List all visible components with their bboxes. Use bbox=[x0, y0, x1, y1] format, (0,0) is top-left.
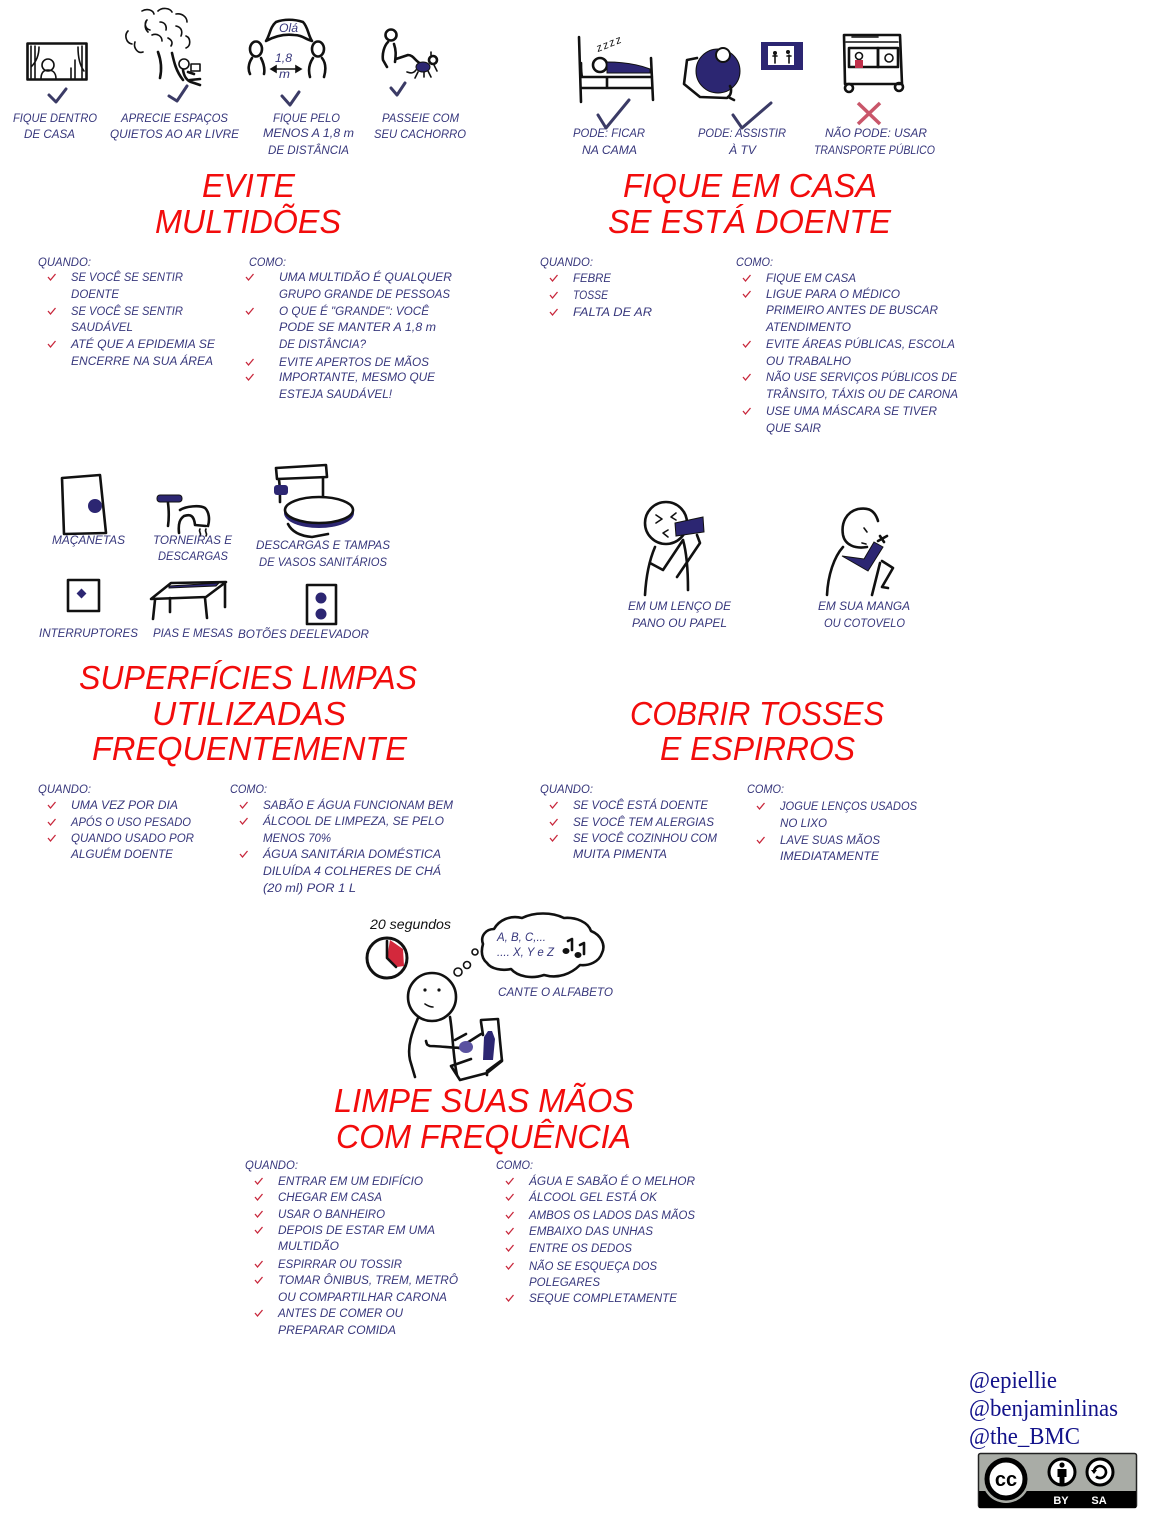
list: como cobrir bbox=[747, 784, 917, 863]
list: quando limpar mãos: TOMAR ÔNIBUS, TREM, METRÔ bbox=[278, 1274, 458, 1287]
list: como limpar mãos: ÁGUA E SABÃO É O MELHOR bbox=[528, 1175, 695, 1188]
icon: check tv bbox=[733, 103, 771, 128]
list: como cobrir: JOGUE LENÇOS USADOS bbox=[779, 801, 917, 813]
icon: person washing hands bbox=[408, 973, 502, 1080]
list: como limpar mãos: COMO: bbox=[496, 1160, 533, 1172]
list: como ficar em casa: USE UMA MÁSCARA SE TIVER bbox=[766, 405, 937, 418]
panel: limpe suas mãos bbox=[245, 914, 695, 1337]
icon: door bbox=[62, 475, 106, 534]
list: como evitar: PODE SE MANTER A 1,8 m bbox=[279, 322, 436, 334]
list: quando limpar mãos: CHEGAR EM CASA bbox=[278, 1192, 382, 1204]
list: quando ficar em casa: FEBRE bbox=[573, 273, 611, 285]
icon: television bbox=[761, 42, 803, 70]
list: como limpar mãos: ENTRE OS DEDOS bbox=[529, 1243, 632, 1255]
icon: check window bbox=[49, 89, 66, 102]
icon: person sneezing into elbow bbox=[827, 508, 893, 595]
credits: twitter handles bbox=[969, 1368, 1118, 1450]
list: como limpar: MENOS 70% bbox=[263, 833, 331, 845]
list: como ficar em casa: COMO: bbox=[736, 257, 773, 269]
icon: faucet bbox=[157, 495, 209, 536]
list: quando limpar mãos: QUANDO: bbox=[245, 1160, 298, 1172]
list: como evitar: IMPORTANTE, MESMO QUE bbox=[279, 372, 435, 384]
list: quando limpar mãos: ESPIRRAR OU TOSSIR bbox=[278, 1259, 402, 1271]
list: como limpar mãos: ÁLCOOL GEL ESTÁ OK bbox=[528, 1191, 658, 1204]
label: em um lenço bbox=[628, 601, 731, 630]
icon: check distance bbox=[282, 92, 299, 105]
icon: check bed bbox=[598, 100, 629, 128]
label: pode ficar na cama: PODE: FICAR bbox=[573, 128, 645, 140]
label: pode assistir tv: PODE: ASSISTIR bbox=[698, 128, 786, 140]
icon: person inside house window bbox=[28, 44, 86, 80]
icon: person in bed bbox=[579, 34, 653, 102]
icon: elevator buttons bbox=[307, 585, 336, 624]
label: fique dentro de casa: FIQUE DENTRO bbox=[13, 113, 97, 125]
label: fique dentro de casa: DE CASA bbox=[24, 129, 75, 141]
credits: twitter handles: @the_BMC bbox=[969, 1424, 1080, 1450]
list: quando evitar: ATÉ QUE A EPIDEMIA SE bbox=[70, 338, 215, 351]
list: quando ficar em casa: TOSSE bbox=[573, 290, 608, 302]
list: como evitar: ESTEJA SAUDÁVEL! bbox=[279, 388, 393, 401]
list: como evitar: COMO: bbox=[249, 257, 286, 269]
label: em sua manga: OU COTOVELO bbox=[824, 618, 905, 630]
heading: fique em casa: SE ESTÁ DOENTE bbox=[608, 203, 892, 240]
list: quando limpar mãos: PREPARAR COMIDA bbox=[278, 1325, 396, 1337]
label: fique dentro de casa bbox=[13, 113, 97, 141]
icon: check dog bbox=[391, 83, 405, 95]
heading: limpe suas mãos bbox=[334, 1082, 634, 1155]
icon: tree with reading person bbox=[126, 8, 200, 85]
list: como cobrir: NO LIXO bbox=[780, 818, 827, 830]
text: Olá: Olá bbox=[279, 23, 299, 35]
list: como limpar: (20 ml) POR 1 L bbox=[263, 883, 356, 895]
list: como limpar mãos: POLEGARES bbox=[529, 1277, 600, 1289]
panel: cobrir tosses e espirros bbox=[540, 502, 917, 863]
list: quando evitar: QUANDO: bbox=[38, 257, 91, 269]
label: fique pelo menos: FIQUE PELO bbox=[273, 113, 340, 125]
label: botões de elevador: BOTÕES DEELEVADOR bbox=[238, 628, 369, 641]
list: como limpar mãos: NÃO SE ESQUEÇA DOS bbox=[529, 1260, 657, 1273]
list: como ficar em casa: OU TRABALHO bbox=[766, 356, 851, 368]
list: como evitar: O QUE É "GRANDE": VOCÊ bbox=[279, 305, 429, 318]
heading: superfícies limpas: FREQUENTEMENTE bbox=[92, 730, 408, 767]
label: não pode transporte: NÃO PODE: USAR bbox=[825, 127, 927, 140]
text: distance m: m bbox=[279, 69, 290, 81]
list: como limpar: ÁGUA SANITÁRIA DOMÉSTICA bbox=[262, 848, 441, 861]
list: como limpar bbox=[230, 784, 453, 895]
label: em um lenço: EM UM LENÇO DE bbox=[628, 601, 731, 613]
list: quando evitar bbox=[38, 257, 215, 368]
list: quando cobrir: QUANDO: bbox=[540, 784, 593, 796]
label: maçanetas: MAÇANETAS bbox=[52, 535, 125, 547]
list: quando ficar em casa bbox=[540, 257, 652, 319]
label: não pode transporte: TRANSPORTE PÚBLICO bbox=[814, 144, 935, 157]
list: como evitar: GRUPO GRANDE DE PESSOAS bbox=[279, 289, 450, 301]
list: quando evitar: DOENTE bbox=[71, 289, 119, 301]
label: passeie com cachorro: PASSEIE COM bbox=[382, 113, 459, 125]
list: como ficar em casa: QUE SAIR bbox=[766, 423, 821, 435]
heading: fique em casa: FIQUE EM CASA bbox=[623, 167, 877, 204]
label: interruptores: INTERRUPTORES bbox=[39, 628, 138, 640]
heading: evite multidões: MULTIDÕES bbox=[155, 203, 341, 240]
list: como ficar em casa: FIQUE EM CASA bbox=[766, 273, 856, 285]
heading: fique em casa bbox=[608, 167, 892, 240]
label: torneiras e descargas: TORNEIRAS E bbox=[153, 535, 232, 547]
list: quando limpar: QUANDO USADO POR bbox=[71, 833, 194, 845]
list: como limpar mãos: EMBAIXO DAS UNHAS bbox=[529, 1226, 653, 1238]
credits: twitter handles: @benjaminlinas bbox=[969, 1396, 1118, 1422]
icon: person in bed: zzzz bbox=[594, 34, 624, 55]
list: quando limpar bbox=[38, 784, 194, 861]
label: descargas e tampas: DE VASOS SANITÁRIOS bbox=[259, 556, 387, 569]
list: quando limpar: ALGUÉM DOENTE bbox=[70, 848, 173, 861]
icon: toilet bbox=[274, 465, 354, 537]
icon: creative commons by-sa badge: BY bbox=[1053, 1495, 1069, 1507]
label: aprecie espaços: QUIETOS AO AR LIVRE bbox=[110, 129, 239, 141]
list: quando limpar mãos: OU COMPARTILHAR CARONA bbox=[278, 1292, 447, 1304]
icon: bus bbox=[844, 35, 903, 92]
label: cante o alfabeto: CANTE O ALFABETO bbox=[498, 987, 613, 999]
list: quando cobrir: SE VOCÊ TEM ALERGIAS bbox=[573, 816, 714, 829]
heading: cobrir tosses: COBRIR TOSSES bbox=[630, 695, 884, 732]
list: quando evitar: SAUDÁVEL bbox=[71, 321, 133, 334]
list: quando limpar: UMA VEZ POR DIA bbox=[71, 800, 178, 812]
icon: clock bbox=[367, 938, 407, 978]
label: pias e mesas: PIAS E MESAS bbox=[153, 628, 233, 640]
icon: thought cloud bbox=[454, 914, 603, 977]
text: 20 segundos: 20 segundos bbox=[369, 916, 451, 932]
list: quando limpar mãos: ENTRAR EM UM EDIFÍCIO bbox=[278, 1175, 423, 1188]
list: quando ficar em casa: FALTA DE AR bbox=[573, 307, 652, 319]
heading: limpe suas mãos: COM FREQUÊNCIA bbox=[336, 1118, 631, 1155]
icon: check tree bbox=[169, 86, 187, 101]
label: passeie com cachorro bbox=[374, 113, 466, 141]
heading: superfícies limpas: UTILIZADAS bbox=[152, 695, 346, 732]
label: em sua manga bbox=[818, 601, 910, 630]
heading: cobrir tosses bbox=[630, 695, 884, 767]
heading: superfícies limpas: SUPERFÍCIES LIMPAS bbox=[79, 659, 417, 696]
list: quando evitar: SE VOCÊ SE SENTIR bbox=[71, 305, 183, 318]
label: torneiras e descargas: DESCARGAS bbox=[158, 551, 228, 563]
list: como ficar em casa: LIGUE PARA O MÉDICO bbox=[766, 288, 900, 301]
icon: cross bbox=[858, 103, 880, 124]
label: em um lenço: PANO OU PAPEL bbox=[632, 618, 727, 630]
text: alfabeto início: A, B, C,... bbox=[496, 932, 546, 944]
label: fique pelo menos bbox=[263, 113, 354, 157]
label: fique pelo menos: MENOS A 1,8 m bbox=[263, 128, 354, 140]
label: em sua manga: EM SUA MANGA bbox=[818, 601, 910, 613]
icon: creative commons by-sa badge: SA bbox=[1091, 1495, 1107, 1507]
label: aprecie espaços: APRECIE ESPAÇOS bbox=[120, 113, 228, 125]
text: distance 1,8: 1,8 bbox=[275, 53, 293, 65]
icon: person walking dog bbox=[383, 30, 437, 78]
list: quando limpar: QUANDO: bbox=[38, 784, 91, 796]
list: como evitar: EVITE APERTOS DE MÃOS bbox=[279, 356, 429, 369]
icon: table bbox=[151, 582, 226, 619]
heading: evite multidões bbox=[155, 167, 341, 240]
list: como evitar: UMA MULTIDÃO É QUALQUER bbox=[279, 271, 452, 284]
list: como ficar em casa: NÃO USE SERVIÇOS PÚBLICOS DE bbox=[766, 371, 957, 384]
icon: two people keeping distance bbox=[249, 20, 325, 77]
list: como evitar bbox=[246, 257, 452, 401]
label: pode ficar na cama: NA CAMA bbox=[582, 145, 637, 157]
list: como ficar em casa: ATENDIMENTO bbox=[765, 322, 851, 334]
credits: twitter handles: @epiellie bbox=[969, 1368, 1057, 1394]
label: descargas e tampas: DESCARGAS E TAMPAS bbox=[256, 540, 390, 552]
list: como cobrir: COMO: bbox=[747, 784, 784, 796]
list: como limpar: DILUÍDA 4 COLHERES DE CHÁ bbox=[263, 865, 441, 878]
icon: light switch bbox=[68, 580, 99, 611]
panel: superfícies limpas bbox=[38, 465, 453, 895]
list: como evitar: DE DISTÂNCIA? bbox=[279, 338, 367, 351]
label: não pode transporte bbox=[814, 127, 935, 157]
list: quando limpar mãos bbox=[245, 1160, 458, 1337]
heading: cobrir tosses: E ESPIRROS bbox=[660, 730, 855, 767]
icon: creative commons by-sa badge: cc bbox=[995, 1469, 1017, 1491]
list: quando limpar mãos: DEPOIS DE ESTAR EM UMA bbox=[278, 1225, 435, 1237]
icon: creative commons by-sa badge bbox=[978, 1454, 1136, 1508]
list: quando limpar: APÓS O USO PESADO bbox=[70, 816, 191, 829]
list: quando limpar mãos: USAR O BANHEIRO bbox=[278, 1209, 385, 1221]
label: pode assistir tv bbox=[698, 128, 786, 157]
list: quando cobrir: SE VOCÊ ESTÁ DOENTE bbox=[573, 799, 708, 812]
list: quando limpar mãos: MULTIDÃO bbox=[278, 1240, 339, 1253]
list: como ficar em casa: PRIMEIRO ANTES DE BUSCAR bbox=[766, 305, 938, 317]
list: como cobrir: LAVE SUAS MÃOS bbox=[780, 834, 880, 847]
panel: fique em casa bbox=[540, 34, 958, 435]
label: pode ficar na cama bbox=[573, 128, 645, 157]
list: como ficar em casa bbox=[736, 257, 958, 435]
list: quando evitar: SE VOCÊ SE SENTIR bbox=[71, 271, 183, 284]
label: descargas e tampas bbox=[256, 540, 390, 569]
list: como limpar mãos bbox=[496, 1160, 695, 1305]
list: quando limpar mãos: ANTES DE COMER OU bbox=[277, 1308, 404, 1320]
heading: evite multidões: EVITE bbox=[202, 167, 296, 204]
heading: superfícies limpas bbox=[79, 659, 417, 767]
list: como ficar em casa: EVITE ÁREAS PÚBLICAS, ESCOLA bbox=[766, 338, 955, 351]
list: quando evitar: ENCERRE NA SUA ÁREA bbox=[71, 355, 213, 368]
label: aprecie espaços bbox=[110, 113, 239, 141]
list: quando cobrir: SE VOCÊ COZINHOU COM bbox=[573, 832, 717, 845]
label: passeie com cachorro: SEU CACHORRO bbox=[374, 129, 466, 141]
list: como cobrir: IMEDIATAMENTE bbox=[780, 851, 879, 863]
list: quando cobrir bbox=[540, 784, 717, 861]
label: fique pelo menos: DE DISTÂNCIA bbox=[268, 144, 349, 157]
text: alfabeto fim: .... X, Y e Z bbox=[497, 947, 555, 959]
label: pode assistir tv: À TV bbox=[728, 144, 757, 157]
list: como limpar: SABÃO E ÁGUA FUNCIONAM BEM bbox=[263, 799, 453, 812]
list: quando cobrir: MUITA PIMENTA bbox=[573, 849, 667, 861]
icon: person coughing into tissue bbox=[645, 502, 704, 595]
label: torneiras e descargas bbox=[153, 535, 232, 563]
list: como ficar em casa: TRÂNSITO, TÁXIS OU DE CARONA bbox=[766, 388, 958, 401]
list: como limpar: ÁLCOOL DE LIMPEZA, SE PELO bbox=[262, 815, 444, 828]
heading: limpe suas mãos: LIMPE SUAS MÃOS bbox=[334, 1082, 634, 1119]
panel: evite multidões bbox=[13, 8, 466, 401]
list: como limpar mãos: AMBOS OS LADOS DAS MÃOS bbox=[528, 1209, 695, 1222]
list: como limpar mãos: SEQUE COMPLETAMENTE bbox=[529, 1293, 677, 1305]
list: quando ficar em casa: QUANDO: bbox=[540, 257, 593, 269]
list: como limpar: COMO: bbox=[230, 784, 267, 796]
icon: person on sofa bbox=[684, 48, 740, 100]
